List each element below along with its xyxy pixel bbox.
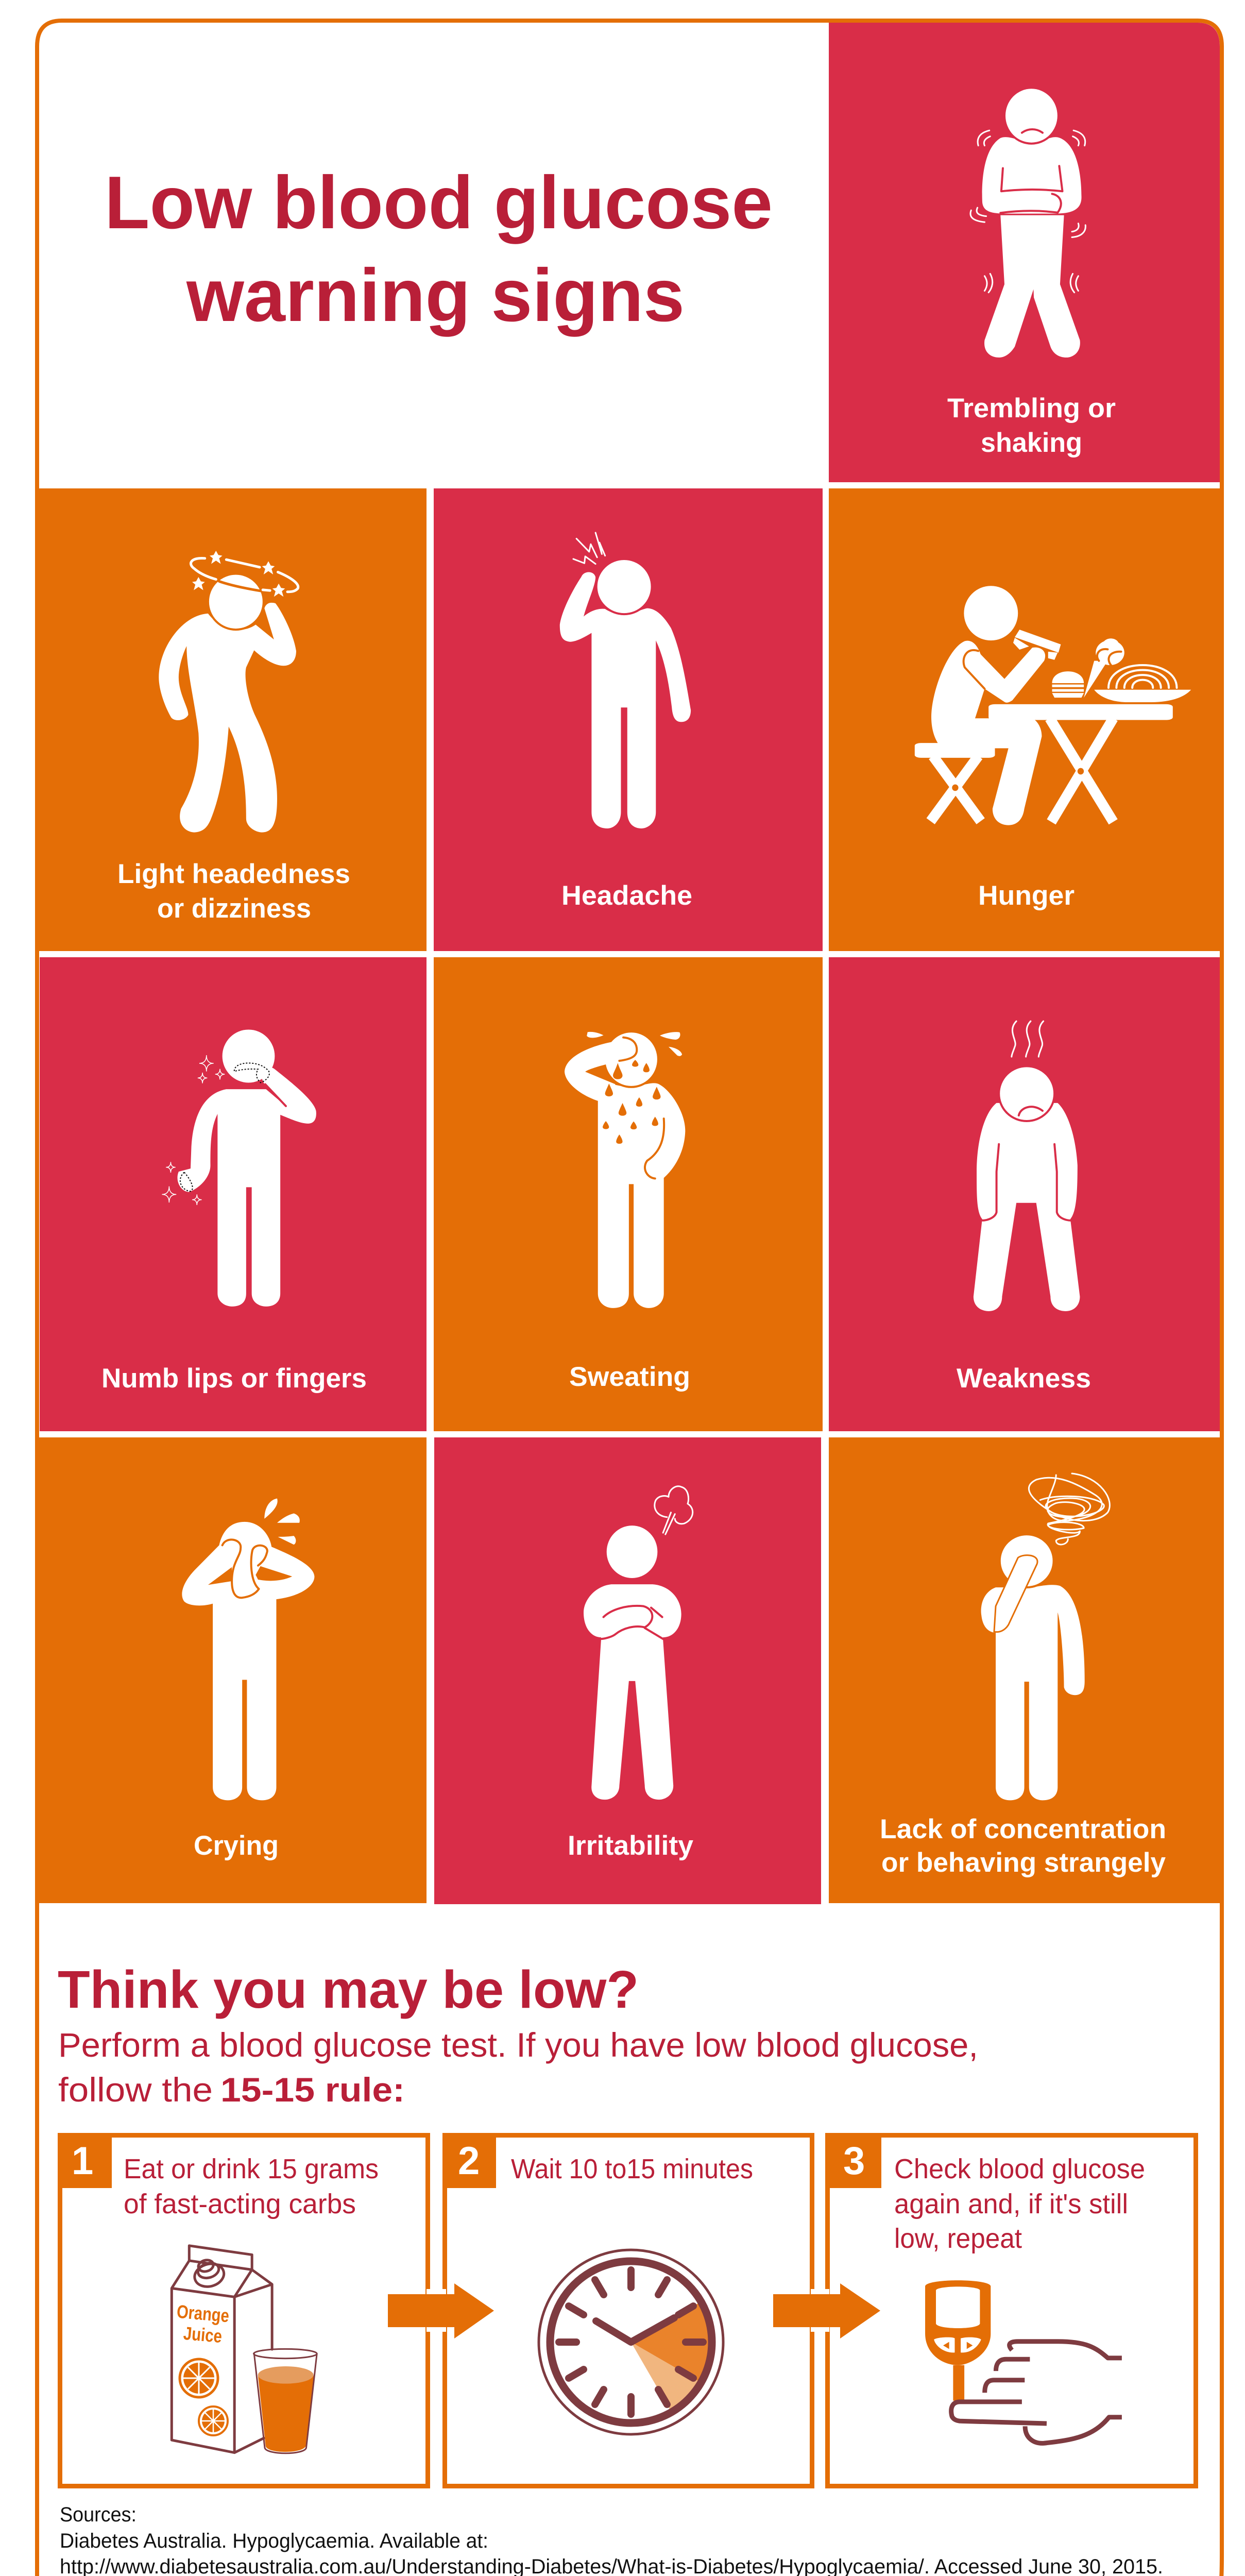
- step 1: eat or drink: [58, 2133, 428, 2486]
- label: hunger: Hunger: [978, 880, 1075, 911]
- label: light headedness: Light headedness: [117, 859, 350, 889]
- step 3: check again: 3: [843, 2139, 865, 2183]
- label: trembling: Trembling or: [947, 393, 1116, 423]
- label: lack of concentration: [880, 1814, 1166, 1878]
- panel: weakness: [829, 957, 1220, 1431]
- icon: clock: [539, 2250, 723, 2434]
- icon: orange juice carton: [172, 2246, 272, 2453]
- label: trembling: [947, 393, 1116, 458]
- icon: numb figure: [162, 1029, 316, 1307]
- text block: sources: Sources:: [60, 2503, 137, 2526]
- icon: orange juice carton: Orange: [176, 2301, 230, 2326]
- label: lack of concentration: or behaving strangely: [881, 1848, 1166, 1878]
- icon: irritable figure with steam cloud: [584, 1486, 693, 1800]
- arrow: step 2 to step 3: [773, 2283, 880, 2338]
- panel: trembling or shaking: [829, 23, 1220, 482]
- panel: crying: [35, 1437, 427, 1903]
- text block: sources: [60, 2503, 1163, 2576]
- label: numb lips: Numb lips or fingers: [101, 1363, 367, 1394]
- label: trembling: shaking: [981, 428, 1082, 458]
- step 1: eat or drink: 1: [72, 2139, 93, 2183]
- step 3: check again: again and, if it's still: [894, 2189, 1128, 2219]
- title: [105, 161, 773, 337]
- panel: irritability: [434, 1437, 821, 1904]
- label: irritability: Irritability: [568, 1831, 694, 1861]
- icon: person eating at table: [915, 586, 1191, 825]
- arrow: step 1 to step 2: [388, 2283, 494, 2338]
- title: warning signs: [186, 253, 685, 337]
- icon: orange juice carton: Juice: [182, 2323, 223, 2347]
- icon: glass of juice: [253, 2349, 317, 2453]
- panel: numb lips or fingers: [40, 957, 427, 1431]
- step 2: wait: Wait 10 to15 minutes: [511, 2154, 753, 2184]
- step 3: check again: Check blood glucose: [894, 2154, 1145, 2184]
- icon: sweating figure: [565, 1031, 685, 1308]
- text block: perform a test: [58, 2026, 978, 2109]
- text block: perform a test: follow the: [58, 2071, 213, 2109]
- icon: dizzy figure: [159, 551, 298, 833]
- icon: confused figure with scribble: [981, 1473, 1110, 1800]
- label: headache: Headache: [561, 880, 692, 911]
- step 1: eat or drink: of fast-acting carbs: [124, 2189, 356, 2219]
- text block: perform a test: Perform a blood glucose test. If you have low blood glucose,: [58, 2026, 978, 2064]
- label: crying: Crying: [194, 1831, 279, 1861]
- panel: sweating: [434, 957, 823, 1431]
- step 3: check again: low, repeat: [894, 2223, 1022, 2254]
- panel: headache: [434, 488, 823, 951]
- label: weakness: Weakness: [957, 1363, 1091, 1394]
- icon: glucose meter and hand: [925, 2280, 1122, 2443]
- text block: perform a test: 15-15 rule:: [220, 2071, 405, 2109]
- step 2: wait: [442, 2133, 812, 2486]
- heading: think you may be low: Think you may be low?: [58, 1960, 639, 2019]
- label: sweating: Sweating: [569, 1362, 690, 1392]
- step 1: eat or drink: Eat or drink 15 grams: [124, 2154, 379, 2184]
- panel: light headedness: [35, 488, 427, 951]
- step 3: check again: [825, 2133, 1196, 2486]
- text block: sources: Diabetes Australia. Hypoglycaemia. Available at:: [60, 2530, 488, 2552]
- label: light headedness: or dizziness: [157, 893, 311, 924]
- title: Low blood glucose: [105, 161, 773, 244]
- label: lack of concentration: Lack of concentration: [880, 1814, 1166, 1844]
- icon: weak figure: [974, 1021, 1080, 1311]
- label: light headedness: [117, 859, 350, 924]
- panel: hunger: [829, 488, 1223, 951]
- panel: lack of concentration: [829, 1437, 1223, 1903]
- icon: trembling figure: [970, 88, 1085, 358]
- icon: crying figure: [182, 1498, 314, 1800]
- icon: headache figure: [560, 533, 691, 828]
- step 2: wait: 2: [458, 2139, 480, 2183]
